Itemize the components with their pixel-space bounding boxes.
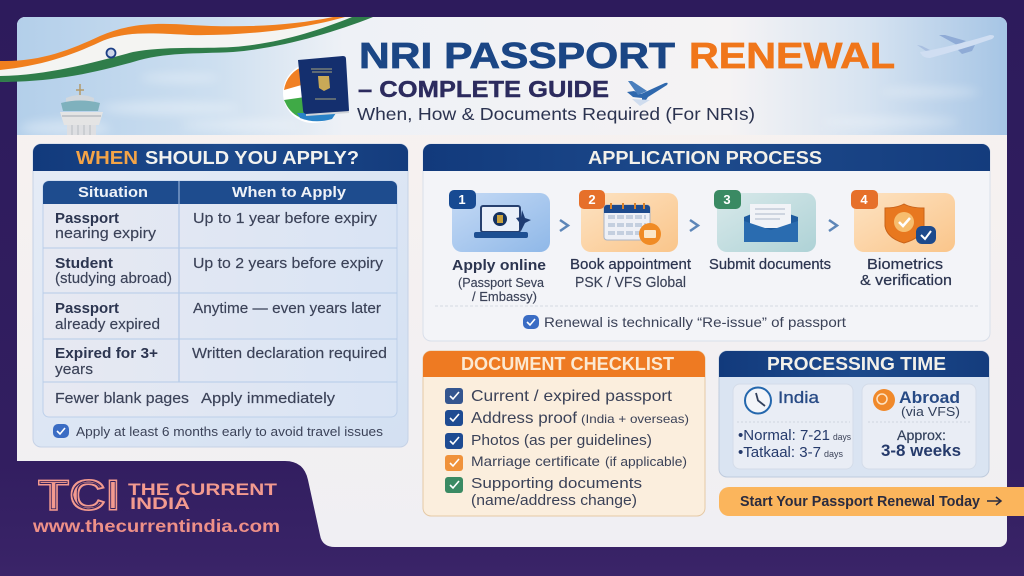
arrow	[987, 497, 1001, 505]
row: nearing expiry: Up to 1 year before expiry	[193, 210, 378, 227]
row: already expired	[55, 300, 381, 333]
card: india	[733, 384, 853, 469]
note: Renewal is technically “Re-issue” of passport	[544, 314, 846, 330]
card: india: days	[833, 432, 851, 443]
icon: calendar	[604, 203, 661, 245]
label	[860, 256, 952, 289]
row: already expired: Passport	[55, 300, 119, 317]
heading: PROCESSING TIME	[767, 354, 946, 374]
arrow	[560, 220, 568, 231]
card: india: •Normal: 7-21	[738, 428, 830, 444]
heading: DOCUMENT CHECKLIST	[461, 354, 674, 374]
row: fewer blank pages: Fewer blank pages	[55, 390, 189, 407]
row: nearing expiry	[55, 210, 378, 242]
label: & verification	[860, 272, 952, 289]
tagline: When, How & Documents Required (For NRIs)	[357, 104, 755, 124]
card: abroad: Approx:	[897, 428, 946, 443]
icon: shield	[885, 204, 936, 244]
title	[359, 35, 895, 76]
control tower	[60, 84, 103, 135]
card: abroad	[862, 384, 976, 469]
label: Book appointment	[570, 256, 692, 273]
logo mark: TCI: TCI	[38, 471, 120, 520]
tip: Apply at least 6 months early to avoid travel issues	[76, 424, 384, 439]
card: abroad: 3-8 weeks	[881, 442, 961, 460]
title: NRI PASSPORT	[359, 35, 675, 76]
step 4	[851, 190, 955, 289]
item: address proof: (India + overseas)	[581, 412, 689, 426]
table header: Situation	[78, 184, 148, 201]
item: supporting documents: Supporting documents	[471, 475, 642, 492]
panel: processing time	[719, 351, 989, 477]
step 2	[570, 190, 692, 291]
heading: WHEN	[76, 148, 138, 168]
card: india: •Tatkaal: 3-7	[738, 445, 821, 461]
label	[570, 256, 692, 291]
airplane	[917, 35, 994, 58]
label: Biometrics	[867, 256, 943, 273]
row: expired 3+ years: years	[55, 361, 93, 378]
panel: document checklist	[423, 351, 705, 516]
brand name	[128, 480, 278, 513]
item: marriage certificate	[445, 453, 687, 471]
subtitle: – COMPLETE GUIDE	[358, 76, 609, 102]
heading: SHOULD YOU APPLY?	[145, 148, 359, 168]
small plane icon	[627, 81, 668, 106]
item: photos: Photos (as per guidelines)	[471, 432, 652, 449]
label: Apply online	[452, 257, 546, 274]
label: PSK / VFS Global	[575, 274, 686, 291]
heading: APPLICATION PROCESS	[588, 148, 822, 168]
badge 4: 4	[860, 192, 868, 207]
icon: globe	[873, 389, 895, 411]
item: address proof	[445, 410, 689, 427]
icon: clock	[745, 388, 771, 414]
website: www.thecurrentindia.com	[32, 516, 280, 536]
badge 2: 2	[588, 192, 596, 207]
call to action: Start Your Passport Renewal Today	[740, 494, 980, 510]
heading	[423, 351, 705, 377]
badge 3: 3	[723, 192, 731, 207]
call to action	[719, 487, 1024, 516]
heading	[33, 144, 408, 171]
row: nearing expiry: Passport	[55, 210, 119, 227]
icon: envelope	[744, 204, 798, 242]
card: india: days	[824, 449, 843, 460]
icon: laptop	[474, 206, 531, 238]
item: marriage certificate: (if applicable)	[605, 455, 687, 469]
card: india: India	[778, 388, 820, 407]
label: / Embassy)	[472, 289, 537, 304]
table header: When to Apply	[232, 184, 347, 201]
item: supporting documents: (name/address change)	[471, 493, 637, 509]
passport icon	[283, 56, 349, 123]
arrow	[690, 220, 698, 231]
row: fewer blank pages	[55, 390, 336, 407]
title: RENEWAL	[689, 35, 895, 76]
row: already expired: already expired	[55, 316, 160, 333]
step 1	[449, 190, 550, 304]
card: abroad: (via VFS)	[901, 404, 960, 419]
sky	[17, 17, 1007, 136]
item: marriage certificate: Marriage certificate	[471, 453, 600, 469]
table	[43, 181, 397, 417]
step 3	[709, 190, 831, 273]
row: student: (studying abroad)	[55, 270, 172, 287]
row: already expired: Anytime — even years later	[193, 300, 381, 317]
heading	[719, 351, 989, 377]
header banner	[0, 17, 1007, 136]
panel: when should you apply	[33, 144, 408, 447]
label	[452, 257, 546, 304]
brand name: INDIA	[130, 494, 190, 513]
brand name: THE CURRENT	[128, 480, 278, 499]
badge 1: 1	[458, 192, 466, 207]
row: expired 3+ years	[55, 345, 387, 378]
card: abroad: Abroad	[899, 388, 960, 407]
item: supporting documents	[445, 475, 642, 509]
item: address proof: Address proof	[471, 410, 578, 427]
panel: application process	[423, 144, 990, 341]
label: Submit documents	[709, 256, 831, 273]
row: fewer blank pages: Apply immediately	[201, 390, 336, 407]
arrow	[829, 220, 837, 231]
item: passport: Current / expired passport	[471, 388, 673, 405]
row: student: Student	[55, 255, 113, 272]
table header	[78, 184, 347, 201]
label: (Passport Seva	[458, 275, 545, 290]
row: student: Up to 2 years before expiry	[193, 255, 384, 272]
logo block	[32, 471, 280, 536]
indian flag ribbon	[0, 17, 373, 82]
row: nearing expiry: nearing expiry	[55, 225, 157, 242]
row: student	[55, 255, 384, 287]
row: expired 3+ years: Expired for 3+	[55, 345, 158, 362]
row: expired 3+ years: Written declaration required	[192, 345, 387, 362]
heading	[423, 144, 990, 171]
